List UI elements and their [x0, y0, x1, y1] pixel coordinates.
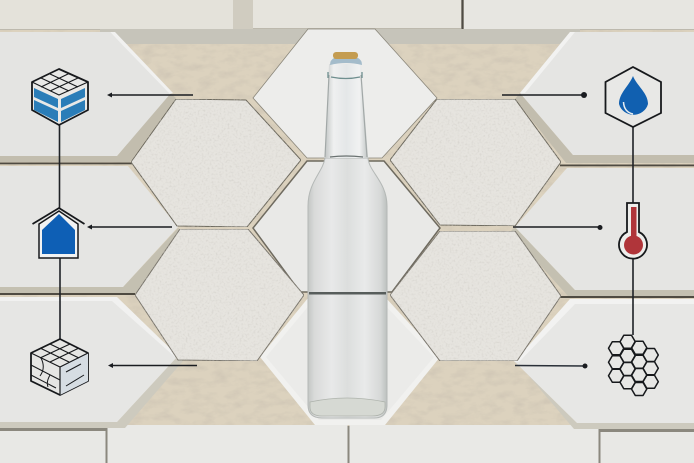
water line [309, 292, 386, 294]
panel: center tile top [253, 29, 437, 158]
bottle neck [325, 64, 368, 158]
connector line: right column [632, 127, 634, 335]
icon: house [32, 208, 84, 258]
bottle body [308, 158, 387, 418]
icon: water drop [606, 67, 661, 127]
top brick row [0, 0, 694, 44]
panel: rough hexagon lower left [135, 229, 304, 361]
bottle cap [333, 52, 358, 59]
pointer: bottom right [515, 364, 588, 368]
arrow: top left [107, 92, 193, 98]
bottom brick row [0, 425, 694, 463]
panel: rough hexagon lower right [390, 231, 561, 361]
bottle base [310, 398, 385, 416]
icon: brick cube [31, 339, 88, 395]
panel: left tile middle [0, 166, 184, 293]
pointer: top right [502, 92, 587, 98]
dark seams [0, 162, 694, 298]
panel: rough hexagon upper left [131, 99, 301, 227]
icon: thermometer [619, 203, 647, 259]
panel: right tile top [515, 32, 694, 163]
arrow: bottom left [108, 363, 197, 368]
panel: center tile bottom [260, 298, 440, 425]
panel: right tile bottom [514, 299, 694, 429]
bottle lip [330, 58, 362, 65]
water surface line top [330, 156, 363, 157]
icon: honeycomb [608, 335, 658, 396]
glass bottle [308, 52, 387, 418]
panel: left tile bottom [0, 297, 183, 428]
icon: layered cube [32, 69, 88, 125]
panel: rough hexagon upper right [390, 99, 561, 226]
pointer: middle right [513, 225, 602, 230]
panel: center tile middle [253, 161, 440, 292]
arrow: middle left [87, 224, 172, 230]
panel: left tile top [0, 32, 176, 162]
connector line: left column [58, 124, 61, 340]
bottle neck ring [328, 72, 362, 78]
panel: right tile middle [510, 168, 694, 296]
